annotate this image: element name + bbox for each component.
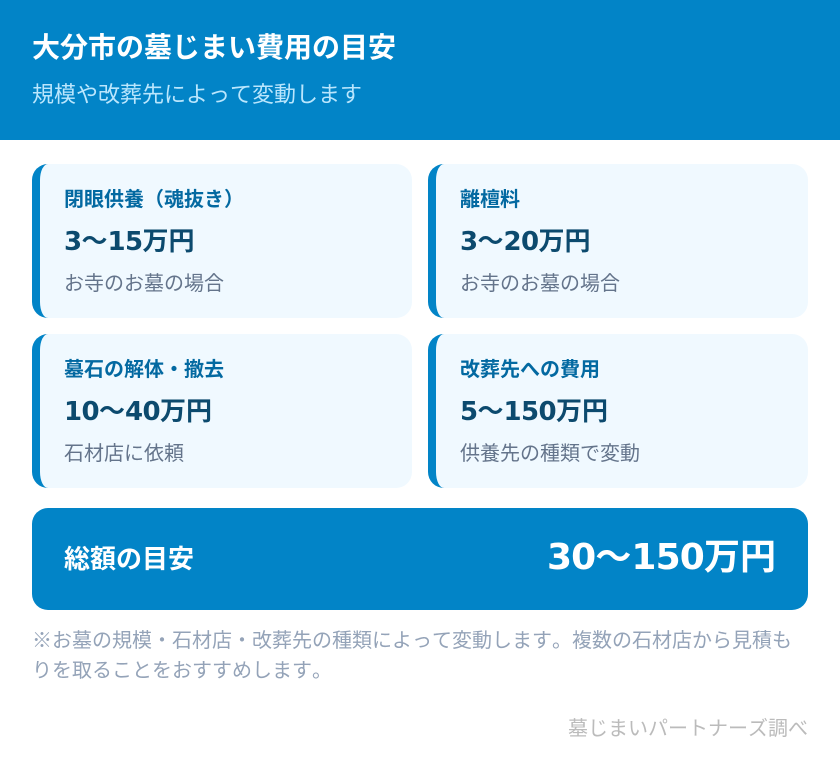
label: 改葬先への費用 xyxy=(460,357,600,381)
value: 3～20万円 xyxy=(460,227,591,257)
panel: 閉眼供養 xyxy=(32,164,412,318)
footnote: ※お墓の規模・石材店・改葬先の種類によって変動します。複数の石材店から見積も xyxy=(32,624,792,653)
panel: 墓石の解体・撤去 xyxy=(32,334,412,488)
total label: 総額の目安 xyxy=(64,545,194,575)
note: 供養先の種類で変動 xyxy=(460,441,640,465)
source: 墓じまいパートナーズ調べ xyxy=(568,716,808,740)
value: 10～40万円 xyxy=(64,397,212,427)
total value: 30～150万円 xyxy=(547,537,776,578)
footnote: りを取ることをおすすめします。 xyxy=(32,654,332,683)
title: 大分市の墓じまい費用の目安 xyxy=(32,31,396,64)
value: 5～150万円 xyxy=(460,397,608,427)
label: 墓石の解体・撤去 xyxy=(64,357,224,381)
note: お寺のお墓の場合 xyxy=(460,271,620,295)
label: 離檀料 xyxy=(460,187,520,211)
note: 石材店に依頼 xyxy=(64,441,184,465)
label: 閉眼供養（魂抜き） xyxy=(64,187,244,211)
header band xyxy=(0,0,840,140)
panel: 離檀料 xyxy=(428,164,808,318)
panel: total xyxy=(32,508,808,610)
footnote xyxy=(32,624,792,683)
subtitle: 規模や改葬先によって変動します xyxy=(32,83,362,108)
note: お寺のお墓の場合 xyxy=(64,271,224,295)
value: 3～15万円 xyxy=(64,227,195,257)
panel: 改葬先への費用 xyxy=(428,334,808,488)
